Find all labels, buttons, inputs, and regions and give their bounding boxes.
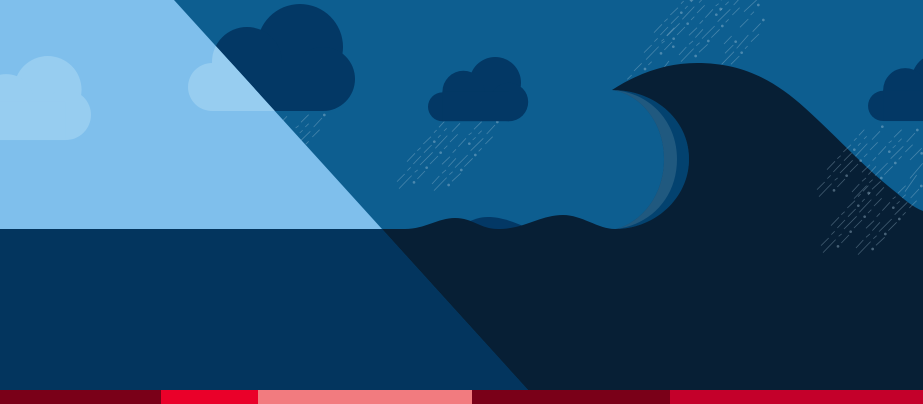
bottom colour bar xyxy=(0,390,923,404)
small background swell behind waves xyxy=(464,217,528,232)
calm sea xyxy=(0,229,528,390)
large dark storm cloud xyxy=(188,4,355,111)
rain under large storm cloud xyxy=(224,114,326,184)
giant dark wave xyxy=(382,63,923,390)
rain under middle storm cloud xyxy=(397,121,499,191)
right dark storm cloud xyxy=(868,54,923,121)
wave curl shading xyxy=(612,90,689,229)
rain above the wave crest xyxy=(627,0,765,79)
middle dark storm cloud xyxy=(428,57,528,121)
rain falling over the wave xyxy=(817,125,923,255)
light clouds in calm sky xyxy=(0,46,275,140)
calm light sky xyxy=(0,0,382,229)
